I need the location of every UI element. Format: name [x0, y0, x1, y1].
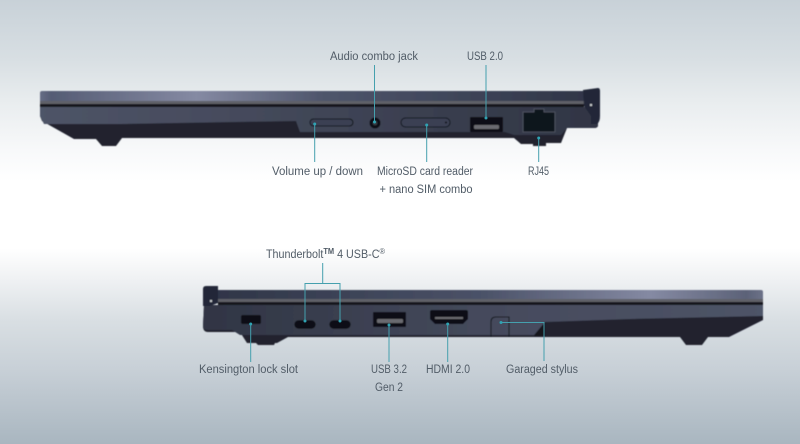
hinge: [583, 88, 600, 124]
port: RJ45: [523, 109, 555, 132]
label: RJ45: RJ45: [528, 166, 549, 178]
hinge: [203, 286, 218, 306]
label: Audio combo jack: Audio combo jack: [330, 51, 418, 63]
label: Kensington lock slot: Kensington lock slot: [199, 364, 299, 376]
label: Thunderbolt 4 USB-C: Thunderbolt: [266, 249, 327, 261]
label: Volume up / down: Volume up / down: [272, 166, 363, 178]
port: USB 3.2: [373, 312, 406, 327]
port: HDMI: [430, 310, 468, 324]
base: [203, 305, 763, 345]
label: HDMI 2.0: HDMI 2.0: [426, 364, 470, 376]
callout dots: [249, 116, 540, 326]
stylus garage: [491, 317, 509, 337]
label: USB 3.2 Gen 2: [371, 364, 407, 394]
label: Thunderbolt 4 USB-C: 4 USB-C: [334, 249, 379, 261]
label: USB 3.2 Gen 2: Gen 2: [375, 382, 403, 394]
label: MicroSD card reader + nano SIM combo: [377, 166, 473, 196]
port: Kensington lock: [241, 315, 261, 324]
label: Thunderbolt 4 USB-C: TM: [323, 247, 334, 256]
laptop: right side view: [40, 88, 600, 146]
port: USB 2.0: [470, 117, 503, 132]
label: MicroSD card reader + nano SIM combo: MicroSD card reader: [377, 166, 473, 178]
label: Garaged stylus: Garaged stylus: [506, 364, 578, 376]
port: volume button: [310, 119, 353, 126]
label: USB 3.2 Gen 2: USB 3.2: [371, 364, 407, 376]
callout lines: [251, 65, 544, 362]
port: Thunderbolt 1: [294, 320, 316, 329]
port: audio jack: [370, 118, 380, 128]
port: Thunderbolt 2: [329, 320, 351, 329]
label: MicroSD card reader + nano SIM combo: + nano SIM combo: [380, 184, 472, 196]
lid: [218, 290, 763, 302]
port: card reader: [401, 118, 450, 127]
label: Thunderbolt 4 USB-C: ®: [379, 247, 385, 256]
base: [40, 107, 598, 146]
label: USB 2.0: USB 2.0: [467, 51, 503, 63]
lid: [40, 91, 584, 104]
laptop: left side view: [203, 286, 763, 345]
